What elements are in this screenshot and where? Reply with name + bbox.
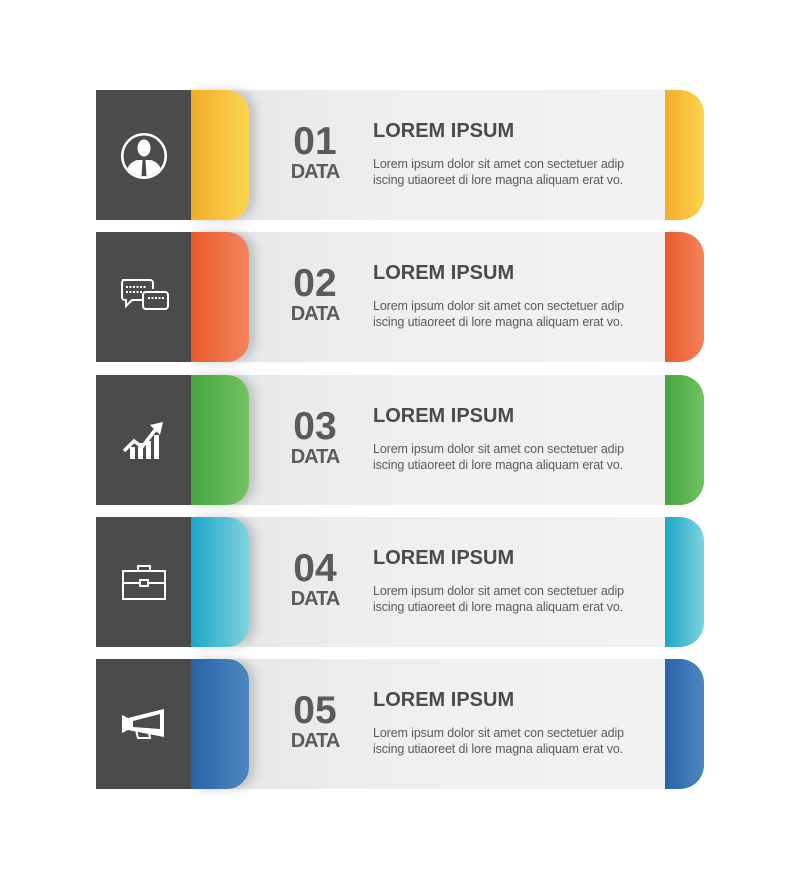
tab 1: [191, 90, 249, 220]
icon panel 5: [96, 659, 191, 789]
row 2: [96, 228, 704, 366]
text: Lorem ipsum dolor sit amet con sectetuer adip: [373, 299, 624, 313]
label DATA: DATA: [291, 446, 339, 468]
icon: person: [121, 133, 167, 179]
heading: LOREM IPSUM: [373, 547, 514, 569]
text: [373, 442, 624, 472]
row 3: [96, 371, 704, 509]
heading: LOREM IPSUM: [373, 405, 514, 427]
icon: briefcase: [122, 565, 166, 600]
label DATA: DATA: [291, 588, 339, 610]
icon panel 2: [96, 232, 191, 362]
icon: growth chart: [122, 422, 163, 459]
text: [373, 584, 624, 614]
text: Lorem ipsum dolor sit amet con sectetuer adip: [373, 584, 624, 598]
text: Lorem ipsum dolor sit amet con sectetuer adip: [373, 157, 624, 171]
heading: LOREM IPSUM: [373, 120, 514, 142]
tab 4: [191, 517, 249, 647]
text: iscing utiaoreet di lore magna aliquam erat vo.: [373, 315, 623, 329]
icon panel 3: [96, 375, 191, 505]
panel 1: [226, 90, 665, 220]
panel 5: [226, 659, 665, 789]
right tab 5: [665, 659, 704, 789]
icon panel 1: [96, 90, 191, 220]
icon: chat: [121, 279, 169, 310]
text: iscing utiaoreet di lore magna aliquam erat vo.: [373, 173, 623, 187]
icon: megaphone: [122, 709, 164, 739]
heading: LOREM IPSUM: [373, 262, 514, 284]
text: iscing utiaoreet di lore magna aliquam erat vo.: [373, 600, 623, 614]
panel 2: [226, 232, 665, 362]
text: [373, 299, 624, 329]
text: Lorem ipsum dolor sit amet con sectetuer adip: [373, 442, 624, 456]
number 05: 05: [293, 689, 337, 732]
tab 2: [191, 232, 249, 362]
text: iscing utiaoreet di lore magna aliquam erat vo.: [373, 742, 623, 756]
text: [373, 157, 624, 187]
tab 5: [191, 659, 249, 789]
text: [373, 726, 624, 756]
text: Lorem ipsum dolor sit amet con sectetuer adip: [373, 726, 624, 740]
label DATA: DATA: [291, 730, 339, 752]
number 02: 02: [293, 262, 337, 305]
right tab 1: [665, 90, 704, 220]
right tab 2: [665, 232, 704, 362]
tab 3: [191, 375, 249, 505]
text: iscing utiaoreet di lore magna aliquam erat vo.: [373, 458, 623, 472]
number 03: 03: [293, 405, 337, 448]
number 04: 04: [293, 547, 337, 590]
row 4: [96, 513, 704, 651]
row 1: [96, 86, 704, 224]
heading: LOREM IPSUM: [373, 689, 514, 711]
label DATA: DATA: [291, 161, 339, 183]
panel 4: [226, 517, 665, 647]
number 01: 01: [293, 120, 337, 163]
right tab 3: [665, 375, 704, 505]
panel 3: [226, 375, 665, 505]
row 5: [96, 655, 704, 793]
label DATA: DATA: [291, 303, 339, 325]
icon panel 4: [96, 517, 191, 647]
right tab 4: [665, 517, 704, 647]
